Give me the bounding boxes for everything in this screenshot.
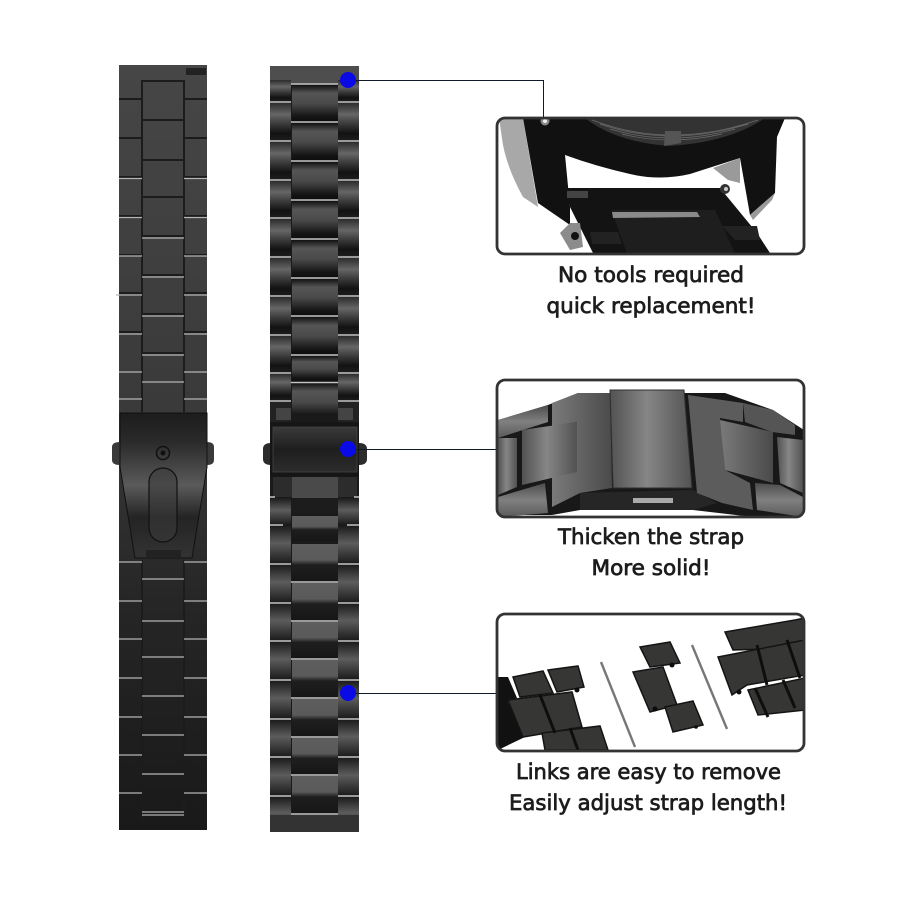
upper links	[270, 80, 359, 426]
text: thicken the strap	[557, 525, 744, 581]
right strap: link side	[263, 66, 367, 832]
text: thicken the strap: More solid!	[592, 556, 710, 581]
panel: removable links detail	[497, 614, 805, 751]
text: links are easy to remove	[509, 760, 787, 816]
lower links	[270, 473, 359, 832]
blue marker: bottom	[340, 685, 356, 701]
leader line: middle callout	[348, 448, 497, 450]
infographic canvas	[112, 65, 806, 832]
text: no tools required	[546, 263, 756, 319]
right strap clasp	[263, 422, 367, 477]
text: no tools required: quick replacement!	[546, 294, 756, 319]
left strap: clasp side	[112, 65, 214, 830]
left strap clasp cover	[112, 413, 214, 558]
leader line: top callout	[348, 80, 544, 118]
panel: quick release detail	[497, 116, 804, 254]
panel: thick strap detail	[497, 380, 804, 517]
blue marker: top	[340, 72, 356, 88]
text: links are easy to remove: Links are easy to remove	[516, 760, 781, 785]
text: no tools required: No tools required	[558, 263, 744, 288]
text: links are easy to remove: Easily adjust strap length!	[509, 791, 787, 816]
text: thicken the strap: Thicken the strap	[557, 525, 744, 550]
blue marker: middle	[340, 441, 356, 457]
leader line: bottom callout	[348, 692, 497, 694]
